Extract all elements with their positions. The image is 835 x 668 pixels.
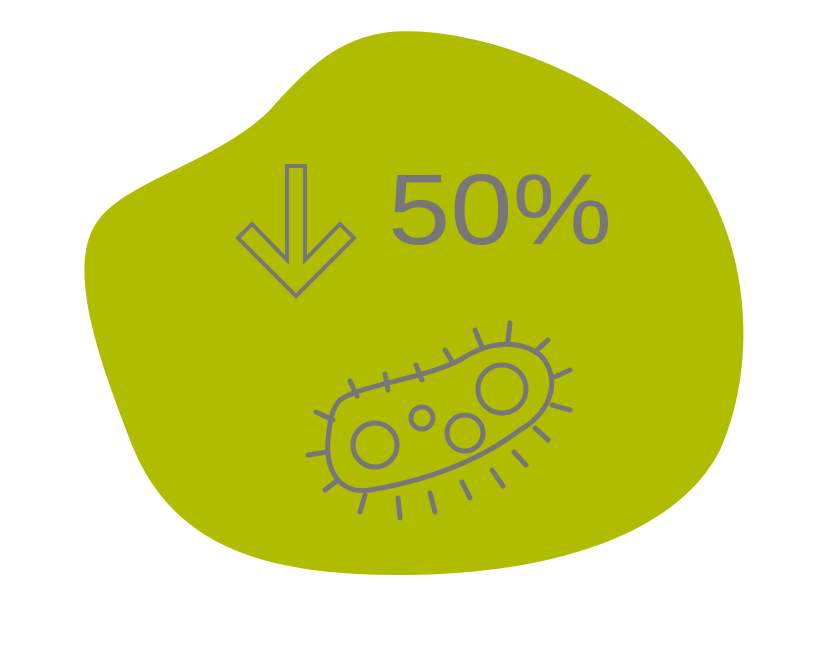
stat: 50%: 50% — [388, 154, 612, 266]
blob background — [84, 31, 743, 575]
icon: down arrow — [238, 166, 354, 296]
icon: bacterium — [308, 323, 570, 518]
